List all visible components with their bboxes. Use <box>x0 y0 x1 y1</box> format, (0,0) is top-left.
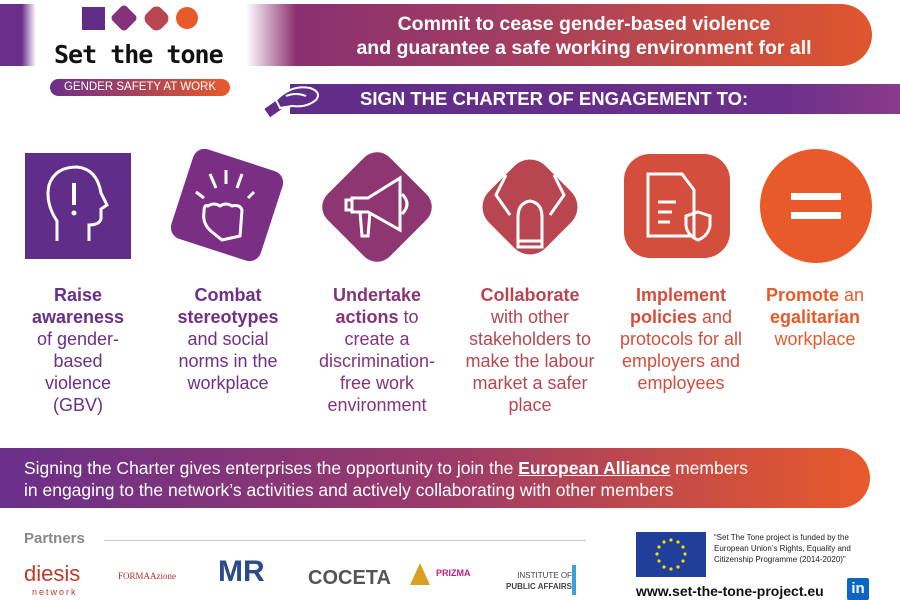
funding note: “Set The Tone project is funded by the European Union’s Rights, Equality and Citizenship Programme (2014-2020)” <box>714 533 851 564</box>
logo shapes <box>82 6 198 30</box>
partner logos: PUBLIC AFFAIRS <box>506 582 572 591</box>
partner logos: network <box>32 587 78 597</box>
icon: handshake <box>264 86 319 118</box>
partner logos: MR <box>218 555 265 588</box>
logo title: Set the tone <box>54 40 223 69</box>
left header bar <box>0 4 36 66</box>
logo tagline <box>50 79 230 96</box>
bottom banner: Signing the Charter gives enterprises the opportunity to join the European Alliance members <box>24 458 748 478</box>
text: implement policies: Implement policies and protocols for all employers and employees <box>620 285 742 393</box>
logo <box>50 6 230 96</box>
icon 5: document shield <box>624 154 730 258</box>
logo tagline: GENDER SAFETY AT WORK <box>64 81 216 93</box>
header banner: Commit to cease gender-based violence <box>398 13 770 35</box>
partner logos <box>24 555 576 597</box>
text: promote: Promote an egalitarian workplace <box>766 285 864 349</box>
partner logos: diesis <box>24 561 80 586</box>
text: raise awareness: Raise awareness of gender-based violence (GBV) <box>32 285 124 415</box>
partners heading: Partners <box>24 530 85 547</box>
icon 6: equals circle <box>760 149 872 263</box>
header banner: and guarantee a safe working environment for all <box>356 37 812 59</box>
icon 2: fist <box>170 148 284 262</box>
partner logos: PRIZMA <box>436 568 470 578</box>
partner logos: COCETA <box>308 567 391 589</box>
icon 3: megaphone <box>322 152 432 262</box>
partner logos: INSTITUTE OF <box>517 571 572 580</box>
bottom banner: in engaging to the network’s activities and actively collaborating with other members <box>24 480 673 500</box>
partner logos: FORMAAzione <box>118 571 176 581</box>
icon: linkedin <box>847 578 869 600</box>
text: undertake actions: Undertake actions to create a discrimination-free work environment <box>319 285 435 415</box>
icon 4: hands <box>482 160 578 254</box>
sign bar: SIGN THE CHARTER OF ENGAGEMENT TO: <box>360 88 748 109</box>
icon: linkedin: in <box>851 580 865 597</box>
text: combat stereotypes: Combat stereotypes and social norms in the workplace <box>177 285 279 393</box>
website: www.set-the-tone-project.eu <box>636 583 824 599</box>
header banner <box>246 4 872 66</box>
text: collaborate: Collaborate with other stakeholders to make the labour market a safer place <box>465 285 595 415</box>
EU flag <box>636 532 706 577</box>
bottom banner <box>0 448 870 508</box>
sign bar <box>290 84 900 114</box>
icon 1: head <box>25 153 131 259</box>
